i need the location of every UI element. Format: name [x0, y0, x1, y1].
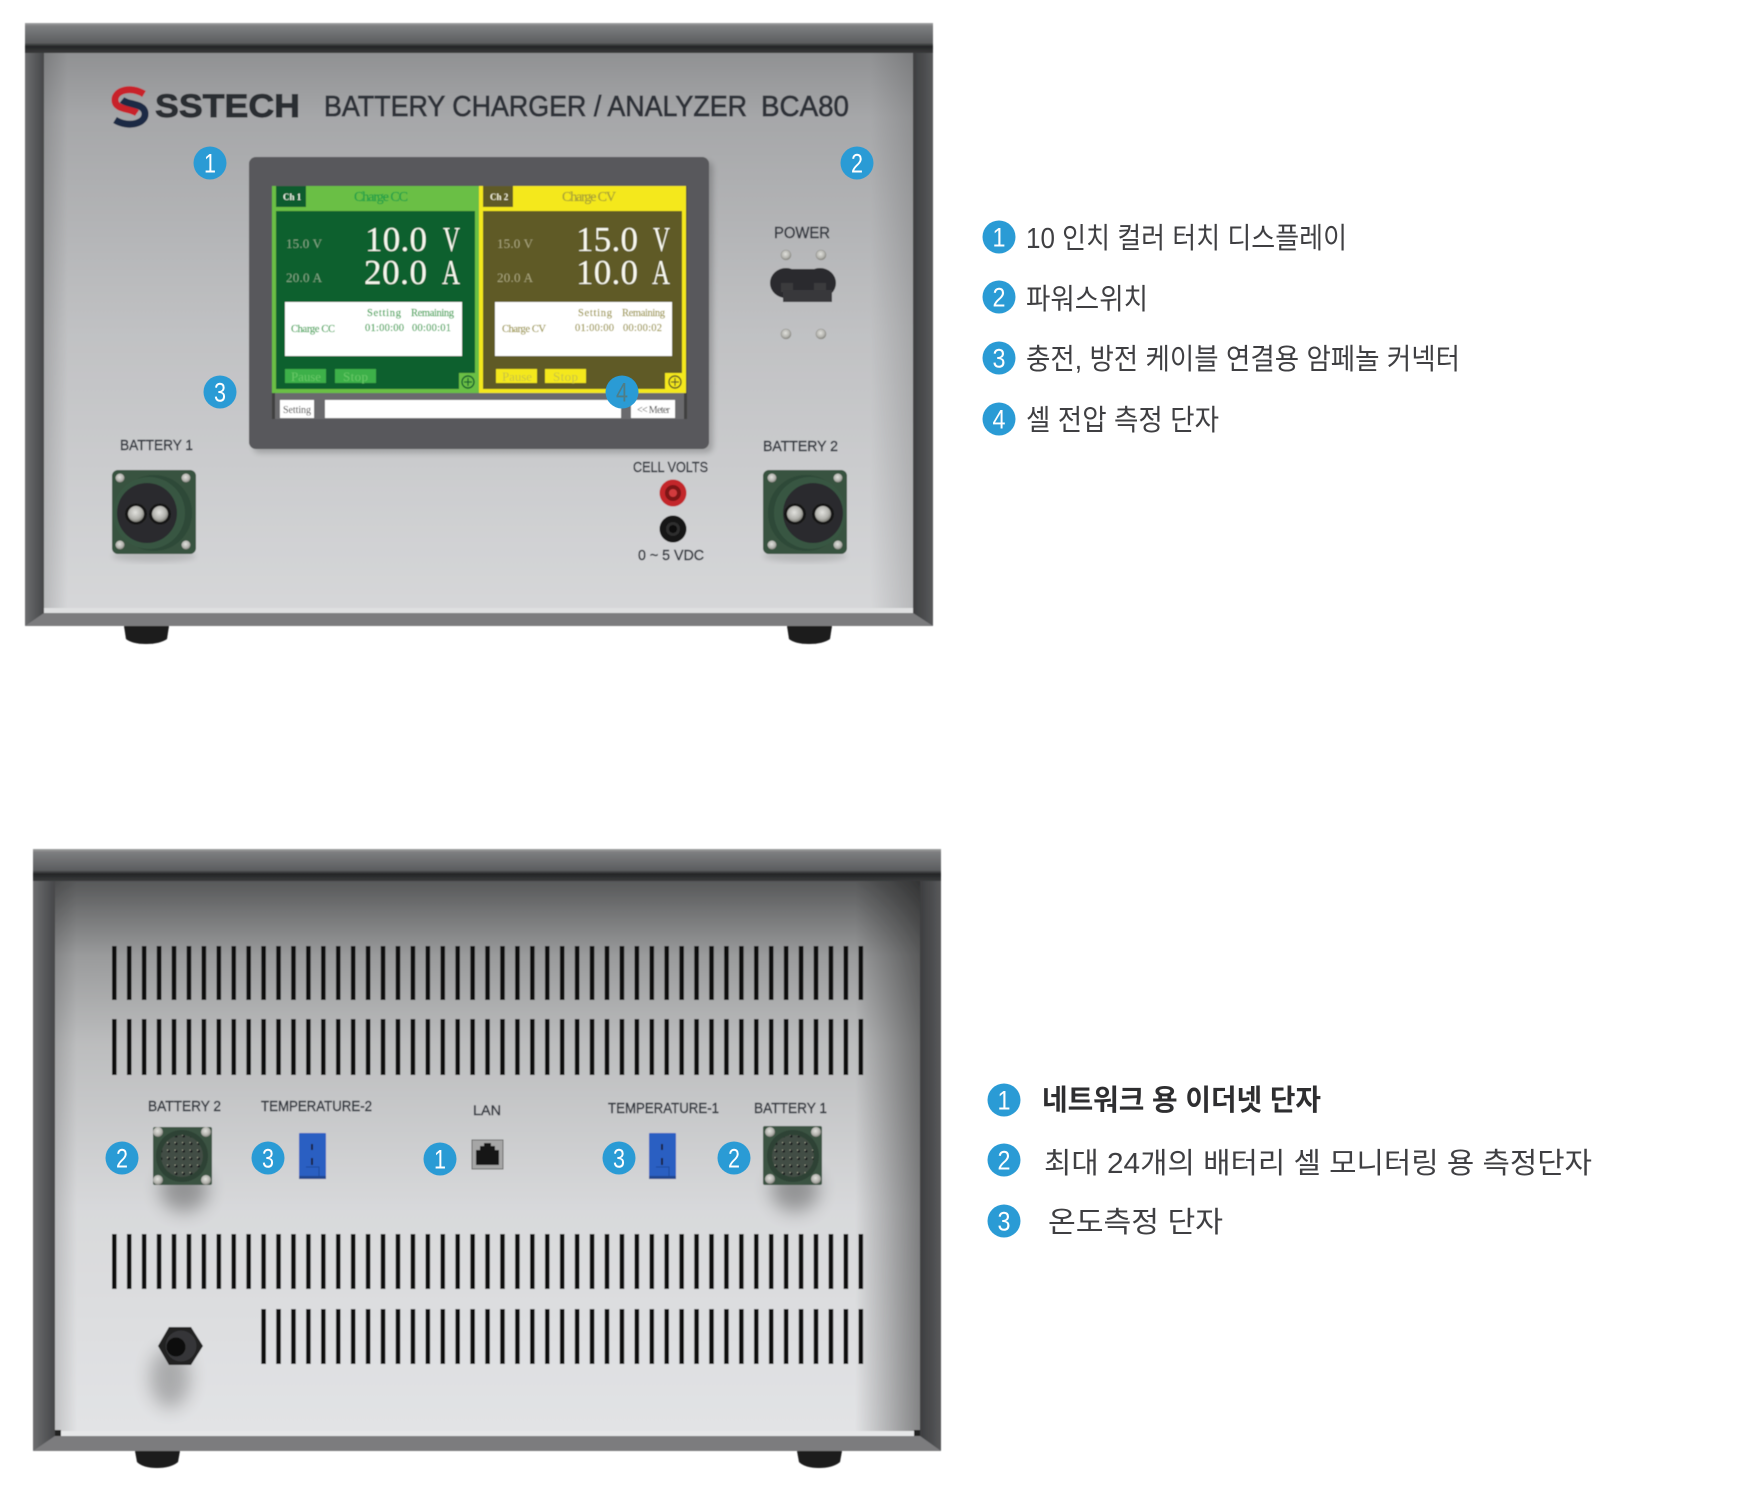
channel 2 screen: Ch 2	[490, 192, 509, 202]
label: LAN: LAN	[473, 1102, 501, 1118]
channel 1 screen: Charge CC	[354, 190, 408, 205]
channel 1 screen: 10.0	[365, 220, 427, 259]
badge: front 1	[194, 146, 226, 180]
screen bottom bar: Setting	[283, 405, 311, 416]
rear foot left	[135, 1451, 180, 1468]
badge: rear 2 left	[106, 1142, 138, 1174]
channel 2 screen: Pause	[502, 369, 532, 384]
label: BATTERY 2 rear: BATTERY 2	[148, 1099, 221, 1115]
heading: product name: BATTERY CHARGER / ANALYZER	[324, 91, 747, 123]
heading: model number: BCA80	[761, 91, 849, 123]
badge: rear 2 left: 2	[116, 1144, 128, 1174]
badge: front 4	[606, 376, 638, 408]
power switch	[770, 250, 836, 339]
channel 2 screen: Remaining	[622, 308, 666, 319]
connector: battery 1	[112, 470, 196, 562]
logo: SSTECH	[115, 88, 300, 124]
vent slots row 2	[112, 1019, 864, 1075]
badge: front 2	[840, 146, 874, 180]
label: BATTERY 1 rear: BATTERY 1	[754, 1101, 827, 1117]
legend item 2: 2	[992, 282, 1006, 312]
front foot right	[787, 626, 832, 644]
channel 2 screen: Charge CV	[562, 190, 616, 205]
channel 1 screen: 20.0 A	[286, 270, 323, 285]
channel 1 screen: 15.0 V	[286, 236, 323, 251]
legend item 2	[982, 280, 1148, 316]
channel 1 screen: Charge CC	[291, 324, 335, 335]
legend item 3: 3	[992, 344, 1006, 374]
legend item 2: 2	[998, 1146, 1010, 1176]
legend: rear panel	[988, 1084, 1592, 1239]
channel 2 screen	[479, 186, 686, 393]
legend: front panel	[982, 220, 1460, 437]
label: TEMPERATURE-1: TEMPERATURE-1	[608, 1101, 719, 1117]
channel 2 screen: A	[652, 253, 671, 292]
legend item 3: 3	[998, 1206, 1010, 1236]
badge: front 3: 3	[214, 378, 226, 408]
channel 1 screen	[272, 186, 479, 393]
channel 2 screen: 10.0	[576, 253, 638, 292]
vent slots row 4	[261, 1309, 864, 1364]
legend item 1: 10 인치 컬러 터치 디스플레이	[1026, 222, 1347, 255]
channel 2 screen: 15.0	[576, 220, 638, 259]
badge: rear 3 right	[602, 1142, 636, 1174]
front foot left	[124, 626, 169, 644]
channel 1 screen: Ch 1	[283, 192, 302, 202]
label: voltage range: 0 ~ 5 VDC	[638, 548, 704, 564]
channel 1 screen: V	[443, 220, 460, 259]
channel 1 screen: 00:00:01	[412, 323, 451, 334]
channel 2 screen: Stop	[553, 369, 578, 384]
rear connector: battery 2	[153, 1127, 212, 1212]
label: BATTERY 1 front: BATTERY 1	[120, 437, 193, 454]
legend item 3	[988, 1204, 1223, 1239]
badge: front 2: 2	[851, 148, 863, 178]
front panel device	[25, 23, 933, 644]
badge: front 3	[204, 376, 236, 408]
badge: rear 3 left	[252, 1142, 284, 1174]
screen bottom bar	[280, 400, 675, 418]
logo: SSTECH: SSTECH	[155, 88, 300, 124]
label: CELL VOLTS: CELL VOLTS	[633, 459, 708, 476]
label: POWER: POWER	[774, 225, 830, 242]
cell volts black terminal	[660, 516, 686, 542]
channel 1 screen: A	[442, 253, 461, 292]
legend item 3: 충전, 방전 케이블 연결용 암페놀 커넥터	[1026, 344, 1460, 376]
label: TEMPERATURE-2: TEMPERATURE-2	[261, 1099, 372, 1115]
label: BATTERY 2 front: BATTERY 2	[763, 438, 838, 455]
channel 1 screen: Stop	[343, 369, 368, 384]
vent slots row 3	[112, 1234, 864, 1289]
rear foot right	[797, 1451, 842, 1468]
legend item 2: 최대 24개의 배터리 셀 모니터링 용 측정단자	[1044, 1147, 1592, 1180]
connector: battery 2	[763, 470, 847, 562]
cell volts red terminal	[660, 480, 686, 506]
channel 1 screen: Setting	[367, 308, 402, 319]
badge: rear 1	[424, 1142, 456, 1176]
badge: rear 2 right	[718, 1142, 750, 1174]
channel 1 screen: Pause	[291, 369, 321, 384]
thermocouple jack 2	[299, 1133, 326, 1179]
cable gland	[150, 1327, 203, 1408]
badge: rear 2 right: 2	[728, 1144, 740, 1174]
legend item 2: 파워스위치	[1026, 283, 1148, 316]
channel 2 screen: 01:00:00	[575, 323, 614, 334]
badge: front 4: 4	[616, 378, 628, 408]
legend item 3: 온도측정 단자	[1048, 1206, 1223, 1239]
thermocouple jack 1	[649, 1133, 676, 1179]
legend item 1: 1	[992, 222, 1006, 252]
badge: rear 3 right: 3	[613, 1144, 625, 1174]
channel 1 screen: Remaining	[411, 308, 455, 319]
channel 2 screen: 00:00:02	[623, 323, 662, 334]
channel 2 screen: 20.0 A	[497, 270, 534, 285]
screen bottom bar: << Meter	[637, 405, 671, 416]
channel 2 screen: V	[653, 220, 670, 259]
channel 2 screen: Charge CV	[502, 324, 546, 335]
front enclosure	[25, 23, 933, 626]
legend item 1 bold: 네트워크 용 이더넷 단자	[1042, 1084, 1321, 1117]
legend item 4: 4	[992, 404, 1006, 434]
legend item 1 bold: 1	[998, 1086, 1010, 1116]
channel 2 screen: Setting	[578, 308, 613, 319]
channel 2 screen: 15.0 V	[497, 236, 534, 251]
rear connector: battery 1	[763, 1126, 822, 1212]
badge: rear 1: 1	[434, 1144, 446, 1174]
legend item 4: 셀 전압 측정 단자	[1026, 404, 1219, 437]
rear enclosure	[33, 849, 941, 1451]
LAN port	[472, 1140, 503, 1169]
vent slots row 1	[112, 946, 864, 1000]
badge: front 1: 1	[204, 148, 216, 178]
channel 1 screen: 01:00:00	[365, 323, 404, 334]
channel 1 screen: 20.0	[364, 253, 427, 292]
rear panel device	[33, 849, 941, 1468]
touch display	[249, 157, 713, 453]
badge: rear 3 left: 3	[262, 1144, 274, 1174]
